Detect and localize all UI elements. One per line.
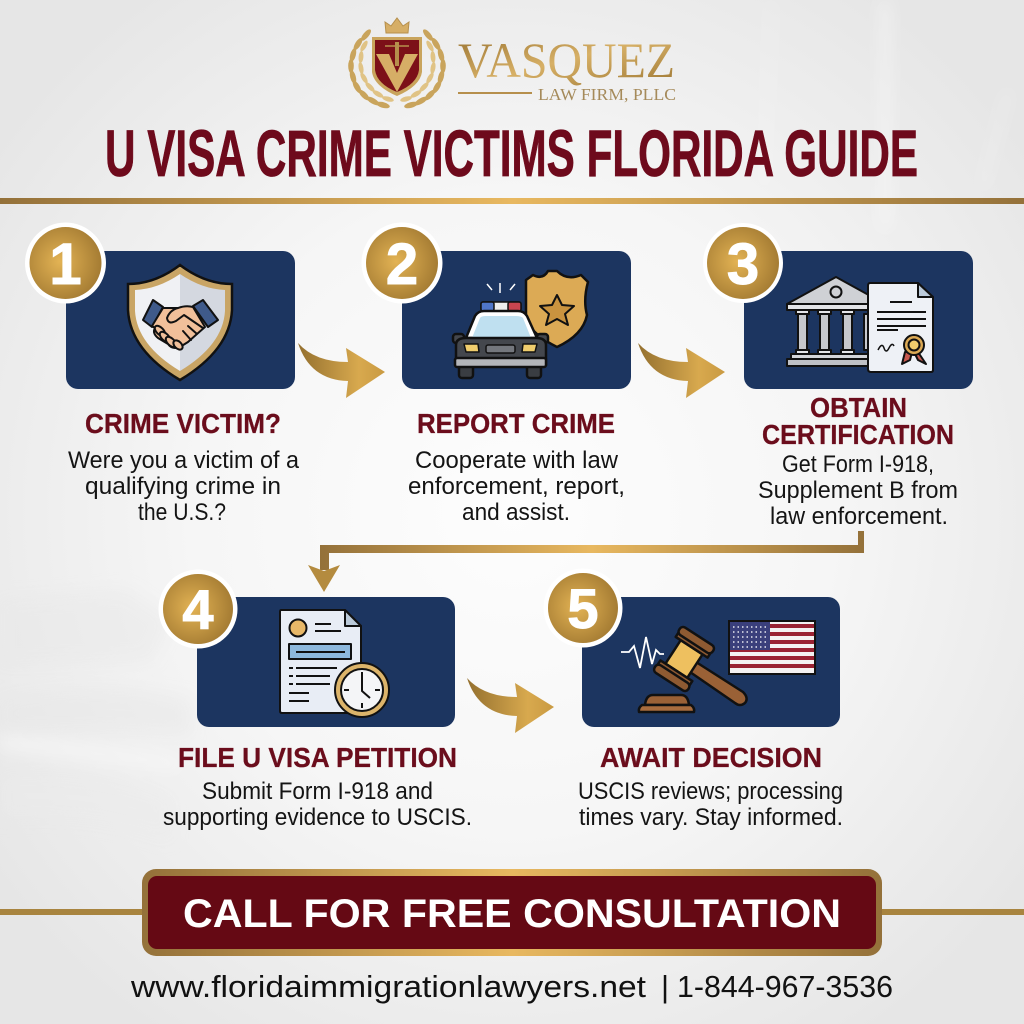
panel: step 2 card	[402, 251, 631, 389]
step 5	[544, 568, 843, 831]
icon: form document and clock	[280, 610, 389, 717]
step 3	[703, 223, 973, 530]
step 3 text: Get Form I-918,	[782, 451, 934, 478]
step 4 text: supporting evidence to USCIS.	[163, 804, 472, 831]
connector arrow from step 3 to step 4	[308, 531, 864, 592]
call to action: CALL FOR FREE CONSULTATION	[183, 892, 841, 936]
step 5 heading: AWAIT DECISION	[600, 742, 822, 773]
step 2 text: enforcement, report,	[408, 473, 625, 500]
step 4 heading: FILE U VISA PETITION	[178, 742, 457, 773]
step 3 text	[758, 451, 958, 530]
icon: crest shield	[372, 37, 422, 96]
step 5 text: times vary. Stay informed.	[579, 804, 843, 831]
icon: crown	[385, 18, 409, 33]
step 1 heading: CRIME VICTIM?	[85, 408, 281, 439]
step 1 text	[68, 447, 299, 526]
badge 4: 4	[182, 578, 214, 641]
step 4	[158, 570, 472, 831]
badge 3: 3	[727, 232, 759, 297]
step 4 text: Submit Form I-918 and	[202, 778, 433, 805]
panel: step 4 card	[197, 597, 455, 727]
icon: shield with handshake	[128, 265, 232, 380]
step 4 text	[163, 778, 472, 831]
badge 1: 1	[49, 232, 82, 297]
logo divider	[458, 92, 532, 94]
panel: step 3 card	[744, 251, 973, 389]
step 1 text: Were you a victim of a	[68, 447, 299, 474]
badge 2: 2	[386, 232, 418, 297]
step 2 text	[408, 447, 625, 526]
icon: laurel wreath	[348, 28, 446, 110]
icon: gavel	[639, 625, 747, 712]
call to action	[0, 869, 1024, 956]
icon: US flag	[728, 620, 816, 675]
step 3 text: Supplement B from	[758, 477, 958, 504]
arrow: step 1 to 2	[298, 343, 385, 398]
step 1 text: qualifying crime in	[85, 473, 281, 500]
panel: step 5 card	[582, 597, 840, 727]
arrow: step 4 to 5	[467, 678, 554, 733]
logo	[348, 18, 676, 110]
badge 4	[158, 570, 238, 648]
step 1 text: the U.S.?	[138, 499, 226, 526]
step 5 text	[578, 778, 843, 831]
step 1	[25, 222, 299, 526]
arrow: step 2 to 3	[638, 343, 725, 398]
badge 5: 5	[567, 577, 599, 640]
logo subtitle: LAW FIRM, PLLC	[538, 85, 676, 104]
footer contact: |	[661, 969, 669, 1004]
badge 1	[25, 222, 106, 304]
badge 5	[544, 568, 622, 648]
step 3 text: law enforcement.	[770, 503, 948, 530]
footer contact: www.floridaimmigrationlawyers.net	[130, 969, 646, 1004]
logo wordmark: VASQUEZ	[458, 32, 675, 88]
icon: courthouse and certificate	[787, 277, 933, 372]
step 2 text: Cooperate with law	[415, 447, 618, 474]
step 5 text: USCIS reviews; processing	[578, 778, 843, 805]
step 3 heading: CERTIFICATION	[762, 419, 954, 450]
step 3 heading: OBTAIN	[810, 392, 907, 423]
panel: step 1 card	[66, 251, 295, 389]
badge 3	[703, 223, 783, 303]
footer contact: 1-844-967-3536	[677, 969, 893, 1004]
step 2 text: and assist.	[462, 499, 570, 526]
badge 2	[362, 222, 442, 304]
step 3 heading	[762, 392, 954, 450]
step 2 heading: REPORT CRIME	[417, 408, 615, 439]
step 2	[362, 222, 631, 526]
header rule	[0, 198, 1024, 204]
footer contact	[130, 969, 893, 1004]
icon: police car and badge	[453, 271, 588, 378]
icon: heartbeat line	[621, 637, 664, 668]
